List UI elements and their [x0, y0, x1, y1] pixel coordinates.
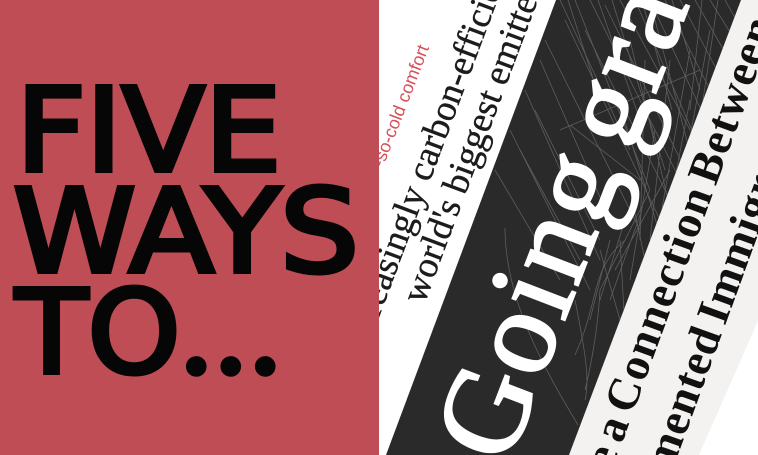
- title line: FIVE: FIVE: [16, 64, 281, 198]
- red kicker: so-so-cold comfort: -so-cold comfort: [368, 42, 433, 169]
- title line: TO: TO: [14, 266, 180, 400]
- title: FIVE WAYS TO...: [13, 64, 359, 400]
- title line: WAYS: WAYS: [13, 166, 359, 300]
- strip: light headline background: [569, 0, 758, 455]
- panel: right collage: [379, 0, 758, 455]
- panel: red title block: [0, 0, 379, 455]
- title dots: ...: [182, 269, 280, 400]
- texture: pale scratches on dark strip: [495, 0, 742, 425]
- strip: dark headline background: [386, 0, 741, 455]
- headline: Going gray: [407, 0, 715, 455]
